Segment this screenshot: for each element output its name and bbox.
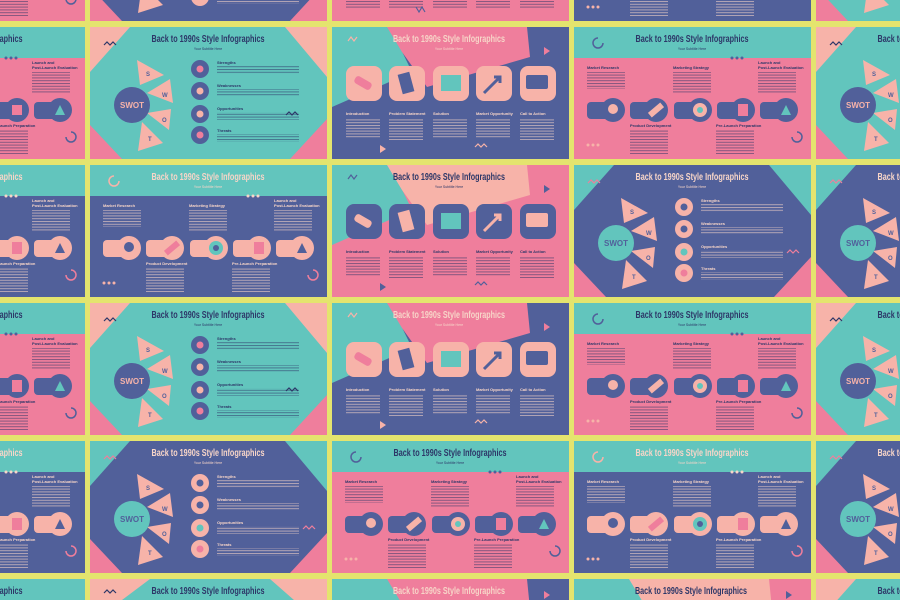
slide r3c4: swot teal	[816, 303, 900, 435]
slide r3c3: timeline pink: Back to 1990s Style Infographics	[636, 310, 749, 321]
slide r4c2: timeline pink: Pre-Launch Preparation	[474, 537, 520, 542]
slide r4c1: swot blue: Back to 1990s Style Infographics	[152, 448, 265, 459]
slide r3c1: swot teal: W	[162, 369, 168, 375]
slide r2c3: swot blue: S	[630, 210, 634, 216]
slide r4c2: timeline pink: Your Subtitle Here	[436, 461, 464, 465]
slide r2c1: timeline blue: Marketing Strategy	[189, 203, 226, 208]
slide r4c1: swot blue: S	[146, 486, 150, 492]
slide r2c2: icons pink: Solution	[433, 249, 450, 254]
slide r1c1: swot teal: T	[148, 137, 152, 143]
slide r2c3: swot blue: Back to 1990s Style Infographics	[636, 172, 749, 183]
slide r1c4: swot teal: SWOT	[846, 101, 870, 110]
slide r3c4: swot teal: T	[874, 413, 878, 419]
slide r2c4: swot blue: W	[888, 231, 894, 237]
slide r4c1: swot blue: Opportunities	[217, 520, 244, 525]
slide r3c1: swot teal: Strengths	[217, 336, 236, 341]
slide r3c3: timeline pink: Post-Launch Evaluation	[758, 341, 804, 346]
slide r4c3: timeline blue: Pre-Launch Preparation	[716, 537, 762, 542]
slide r3c4: swot teal: SWOT	[846, 377, 870, 386]
slide r1c1: swot teal: SWOT	[120, 101, 144, 110]
slide r4c1: swot blue: Weaknesses	[217, 497, 242, 502]
slide r2c1: timeline blue: Your Subtitle Here	[194, 185, 222, 189]
slide r4c3: timeline blue: Your Subtitle Here	[678, 461, 706, 465]
slide r1c1: swot teal	[90, 27, 327, 159]
slide r3c1: swot teal: Back to 1990s Style Infographics	[152, 310, 265, 321]
slide r1c4: swot teal	[816, 27, 900, 159]
slide r1c0: timeline pink	[0, 27, 85, 159]
slide r2c4: swot blue	[816, 165, 900, 297]
slide r2c1: timeline blue: Market Research	[103, 203, 136, 208]
slide r1c2: icons blue: Problem Statement	[389, 111, 426, 116]
slide r1c1: swot teal: W	[162, 93, 168, 99]
slide r0c1: swot blue	[90, 0, 327, 21]
slide r2c1: timeline blue: Back to 1990s Style Infographics	[152, 172, 265, 183]
slide r4c1: swot blue: W	[162, 507, 168, 513]
slide r4c2: timeline pink	[332, 441, 569, 573]
slide r4c4: swot blue: O	[888, 532, 893, 538]
slide r0c4: swot teal	[816, 0, 900, 21]
slide r3c2: icons blue: Back to 1990s Style Infographics	[393, 310, 505, 321]
slide r5c3: icons pink: Back to 1990s Style Infographics	[635, 586, 747, 597]
slide r2c2: icons pink: Call to Action	[520, 249, 546, 254]
slide r1c1: swot teal: Threats	[217, 128, 232, 133]
slide r2c2: icons pink: Problem Statement	[389, 249, 426, 254]
slide r3c2: icons blue: Solution	[433, 387, 450, 392]
slide r1c3: timeline pink: Marketing Strategy	[673, 65, 710, 70]
slide r1c3: timeline pink: Pre-Launch Preparation	[716, 123, 762, 128]
slide r4c1: swot blue: Threats	[217, 542, 232, 547]
slide r3c3: timeline pink: Pre-Launch Preparation	[716, 399, 762, 404]
slide r5c1: swot teal	[90, 579, 327, 600]
slide r3c0: timeline pink	[0, 303, 85, 435]
slide r4c4: swot blue: S	[872, 486, 876, 492]
slide r3c1: swot teal: S	[146, 348, 150, 354]
slide r4c4: swot blue	[816, 441, 900, 573]
slide r4c1: swot blue	[90, 441, 327, 573]
slide r4c0: timeline blue	[0, 441, 85, 573]
slide r4c3: timeline blue: Marketing Strategy	[673, 479, 710, 484]
slide r3c2: icons blue: Call to Action	[520, 387, 546, 392]
slide r2c0: timeline blue: Post-Launch Evaluation	[32, 203, 78, 208]
slide r0c2: icons pink	[332, 0, 569, 21]
slide r1c1: swot teal: S	[146, 72, 150, 78]
slide r3c4: swot teal: S	[872, 348, 876, 354]
slide r2c3: swot blue: Strengths	[701, 198, 720, 203]
slide r2c3: swot blue: O	[646, 256, 651, 262]
slide r2c2: icons pink: Back to 1990s Style Infographics	[393, 172, 505, 183]
slide r3c3: timeline pink: Product Development	[630, 399, 672, 404]
slide r5c4: swot teal	[816, 579, 900, 600]
slide r1c2: icons blue: Solution	[433, 111, 450, 116]
slide r2c0: timeline blue	[0, 165, 85, 297]
slide r1c3: timeline pink: Product Development	[630, 123, 672, 128]
slide r2c2: icons pink: Market Opportunity	[476, 249, 514, 254]
slide r2c4: swot blue: O	[888, 256, 893, 262]
slide r2c1: timeline blue: Post-Launch Evaluation	[274, 203, 320, 208]
slide r1c2: icons blue: Market Opportunity	[476, 111, 514, 116]
slide r1c4: swot teal: W	[888, 93, 894, 99]
slide r4c3: timeline blue: Launch and	[758, 474, 781, 479]
slide r1c2: icons blue: Introduction	[346, 111, 370, 116]
slide r4c3: timeline blue: Back to 1990s Style Infographics	[636, 448, 749, 459]
slide r3c2: icons blue: Introduction	[346, 387, 370, 392]
slide r1c4: swot teal: T	[874, 137, 878, 143]
slide r4c0: timeline blue: Launch and	[32, 474, 55, 479]
slide r2c2: icons pink: Your Subtitle Here	[435, 185, 463, 189]
slide r1c3: timeline pink: Market Research	[587, 65, 620, 70]
slide r3c2: icons blue: Problem Statement	[389, 387, 426, 392]
slide r4c2: timeline pink: Back to 1990s Style Infographics	[394, 448, 507, 459]
slide r1c1: swot teal: Weaknesses	[217, 83, 242, 88]
slide r3c0: timeline pink: Post-Launch Evaluation	[32, 341, 78, 346]
slide r5c0: timeline teal header	[0, 579, 85, 600]
slide r2c3: swot blue: W	[646, 231, 652, 237]
slide r1c0: timeline pink: Post-Launch Evaluation	[32, 65, 78, 70]
slide r3c1: swot teal: Threats	[217, 404, 232, 409]
slide r3c1: swot teal: SWOT	[120, 377, 144, 386]
slide r5c2: icons blue	[332, 579, 569, 600]
slide r2c1: timeline blue: Product Development	[146, 261, 188, 266]
slide r2c3: swot blue: T	[632, 275, 636, 281]
slide r4c3: timeline blue: Post-Launch Evaluation	[758, 479, 804, 484]
slide r1c3: timeline pink: Post-Launch Evaluation	[758, 65, 804, 70]
slide r1c2: icons blue: Back to 1990s Style Infographics	[393, 34, 505, 45]
slide r2c4: swot blue: S	[872, 210, 876, 216]
slide r3c3: timeline pink: Launch and	[758, 336, 781, 341]
slide r3c3: timeline pink: Marketing Strategy	[673, 341, 710, 346]
slide r1c2: icons blue: Your Subtitle Here	[435, 47, 463, 51]
slide r2c3: swot blue: Weaknesses	[701, 221, 726, 226]
slide r4c1: swot blue: T	[148, 551, 152, 557]
slide r3c2: icons blue: Your Subtitle Here	[435, 323, 463, 327]
slide r4c3: timeline blue: Market Research	[587, 479, 620, 484]
slide r3c3: timeline pink: Market Research	[587, 341, 620, 346]
slide r2c4: swot blue: SWOT	[846, 239, 870, 248]
slide r4c3: timeline blue: Product Development	[630, 537, 672, 542]
slide r3c1: swot teal: Weaknesses	[217, 359, 242, 364]
slide r1c1: swot teal: O	[162, 118, 167, 124]
slide r1c3: timeline pink: Launch and	[758, 60, 781, 65]
slide r2c4: swot blue: T	[874, 275, 878, 281]
slide r2c3: swot blue	[574, 165, 811, 297]
slide r4c2: timeline pink: Market Research	[345, 479, 378, 484]
slide r1c1: swot teal: Your Subtitle Here	[194, 47, 222, 51]
slide r2c3: swot blue: SWOT	[604, 239, 628, 248]
slide r0c0: timeline pink	[0, 0, 85, 21]
slide r3c0: timeline pink: Launch and	[32, 336, 55, 341]
slide r1c2: icons blue: Call to Action	[520, 111, 546, 116]
slide r2c1: timeline blue	[90, 165, 327, 297]
slide r3c1: swot teal: T	[148, 413, 152, 419]
slide r1c4: swot teal: S	[872, 72, 876, 78]
slide r2c2: icons pink: Introduction	[346, 249, 370, 254]
slide r4c1: swot blue: Strengths	[217, 474, 236, 479]
slide r3c2: icons blue	[332, 303, 569, 435]
slide r3c1: swot teal: Your Subtitle Here	[194, 323, 222, 327]
slide r2c3: swot blue: Threats	[701, 266, 716, 271]
slide r3c4: swot teal: O	[888, 394, 893, 400]
slide r4c4: swot blue: T	[874, 551, 878, 557]
slide r2c1: timeline blue: Pre-Launch Preparation	[232, 261, 278, 266]
slide r1c3: timeline pink: Your Subtitle Here	[678, 47, 706, 51]
slide r4c1: swot blue: SWOT	[120, 515, 144, 524]
slide r4c1: swot blue: O	[162, 532, 167, 538]
slide r1c3: timeline pink: Back to 1990s Style Infographics	[636, 34, 749, 45]
slide r1c3: timeline pink	[574, 27, 811, 159]
slide r4c2: timeline pink: Marketing Strategy	[431, 479, 468, 484]
slide r4c2: timeline pink: Product Development	[388, 537, 430, 542]
slide r1c1: swot teal: Strengths	[217, 60, 236, 65]
slide r4c3: timeline blue	[574, 441, 811, 573]
slide r3c1: swot teal: Opportunities	[217, 382, 244, 387]
slide r4c4: swot blue: SWOT	[846, 515, 870, 524]
slide r1c2: icons blue	[332, 27, 569, 159]
slide r4c4: swot blue: W	[888, 507, 894, 513]
slide r5c2: icons blue: Back to 1990s Style Infographics	[393, 586, 505, 597]
slide r1c1: swot teal: Opportunities	[217, 106, 244, 111]
slide r2c3: swot blue: Opportunities	[701, 244, 728, 249]
slide r1c0: timeline pink: Launch and	[32, 60, 55, 65]
slide r2c2: icons pink	[332, 165, 569, 297]
slide r4c2: timeline pink: Post-Launch Evaluation	[516, 479, 562, 484]
slide r3c2: icons blue: Market Opportunity	[476, 387, 514, 392]
slide r3c3: timeline pink: Your Subtitle Here	[678, 323, 706, 327]
slide r1c4: swot teal: O	[888, 118, 893, 124]
slide r5c1: swot teal: Back to 1990s Style Infographics	[152, 586, 265, 597]
slide r4c2: timeline pink: Launch and	[516, 474, 539, 479]
slide r3c1: swot teal: O	[162, 394, 167, 400]
slide r3c1: swot teal	[90, 303, 327, 435]
slide r1c1: swot teal: Back to 1990s Style Infographics	[152, 34, 265, 45]
slide r2c1: timeline blue: Launch and	[274, 198, 297, 203]
slide r4c0: timeline blue: Post-Launch Evaluation	[32, 479, 78, 484]
slide r3c3: timeline pink	[574, 303, 811, 435]
slide r3c4: swot teal: W	[888, 369, 894, 375]
slide r2c0: timeline blue: Launch and	[32, 198, 55, 203]
slide r2c3: swot blue: Your Subtitle Here	[678, 185, 706, 189]
slide r4c1: swot blue: Your Subtitle Here	[194, 461, 222, 465]
slide r0c3: timeline blue	[574, 0, 811, 21]
slide r5c3: icons pink	[574, 579, 811, 600]
